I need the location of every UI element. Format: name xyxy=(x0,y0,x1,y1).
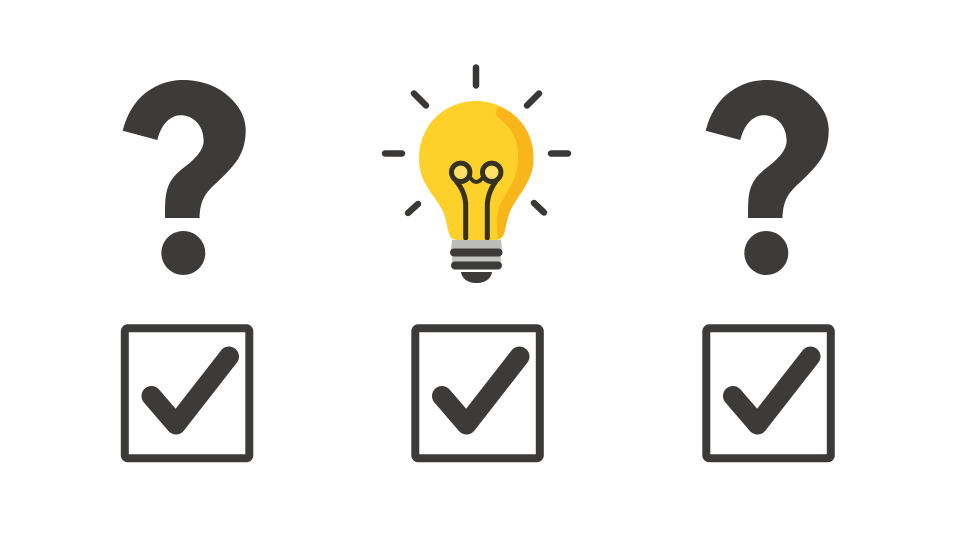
filament xyxy=(452,163,501,238)
icon: center checkbox xyxy=(415,328,540,458)
icon: right question mark xyxy=(706,80,829,275)
icon: left checkbox xyxy=(125,328,249,458)
icon: light bulb xyxy=(385,68,568,283)
light rays xyxy=(385,68,568,213)
bulb shading xyxy=(496,107,534,239)
icon: right checkbox xyxy=(706,328,831,458)
bulb glass xyxy=(419,101,534,240)
screw base xyxy=(450,240,502,283)
icon: left question mark xyxy=(123,80,246,275)
